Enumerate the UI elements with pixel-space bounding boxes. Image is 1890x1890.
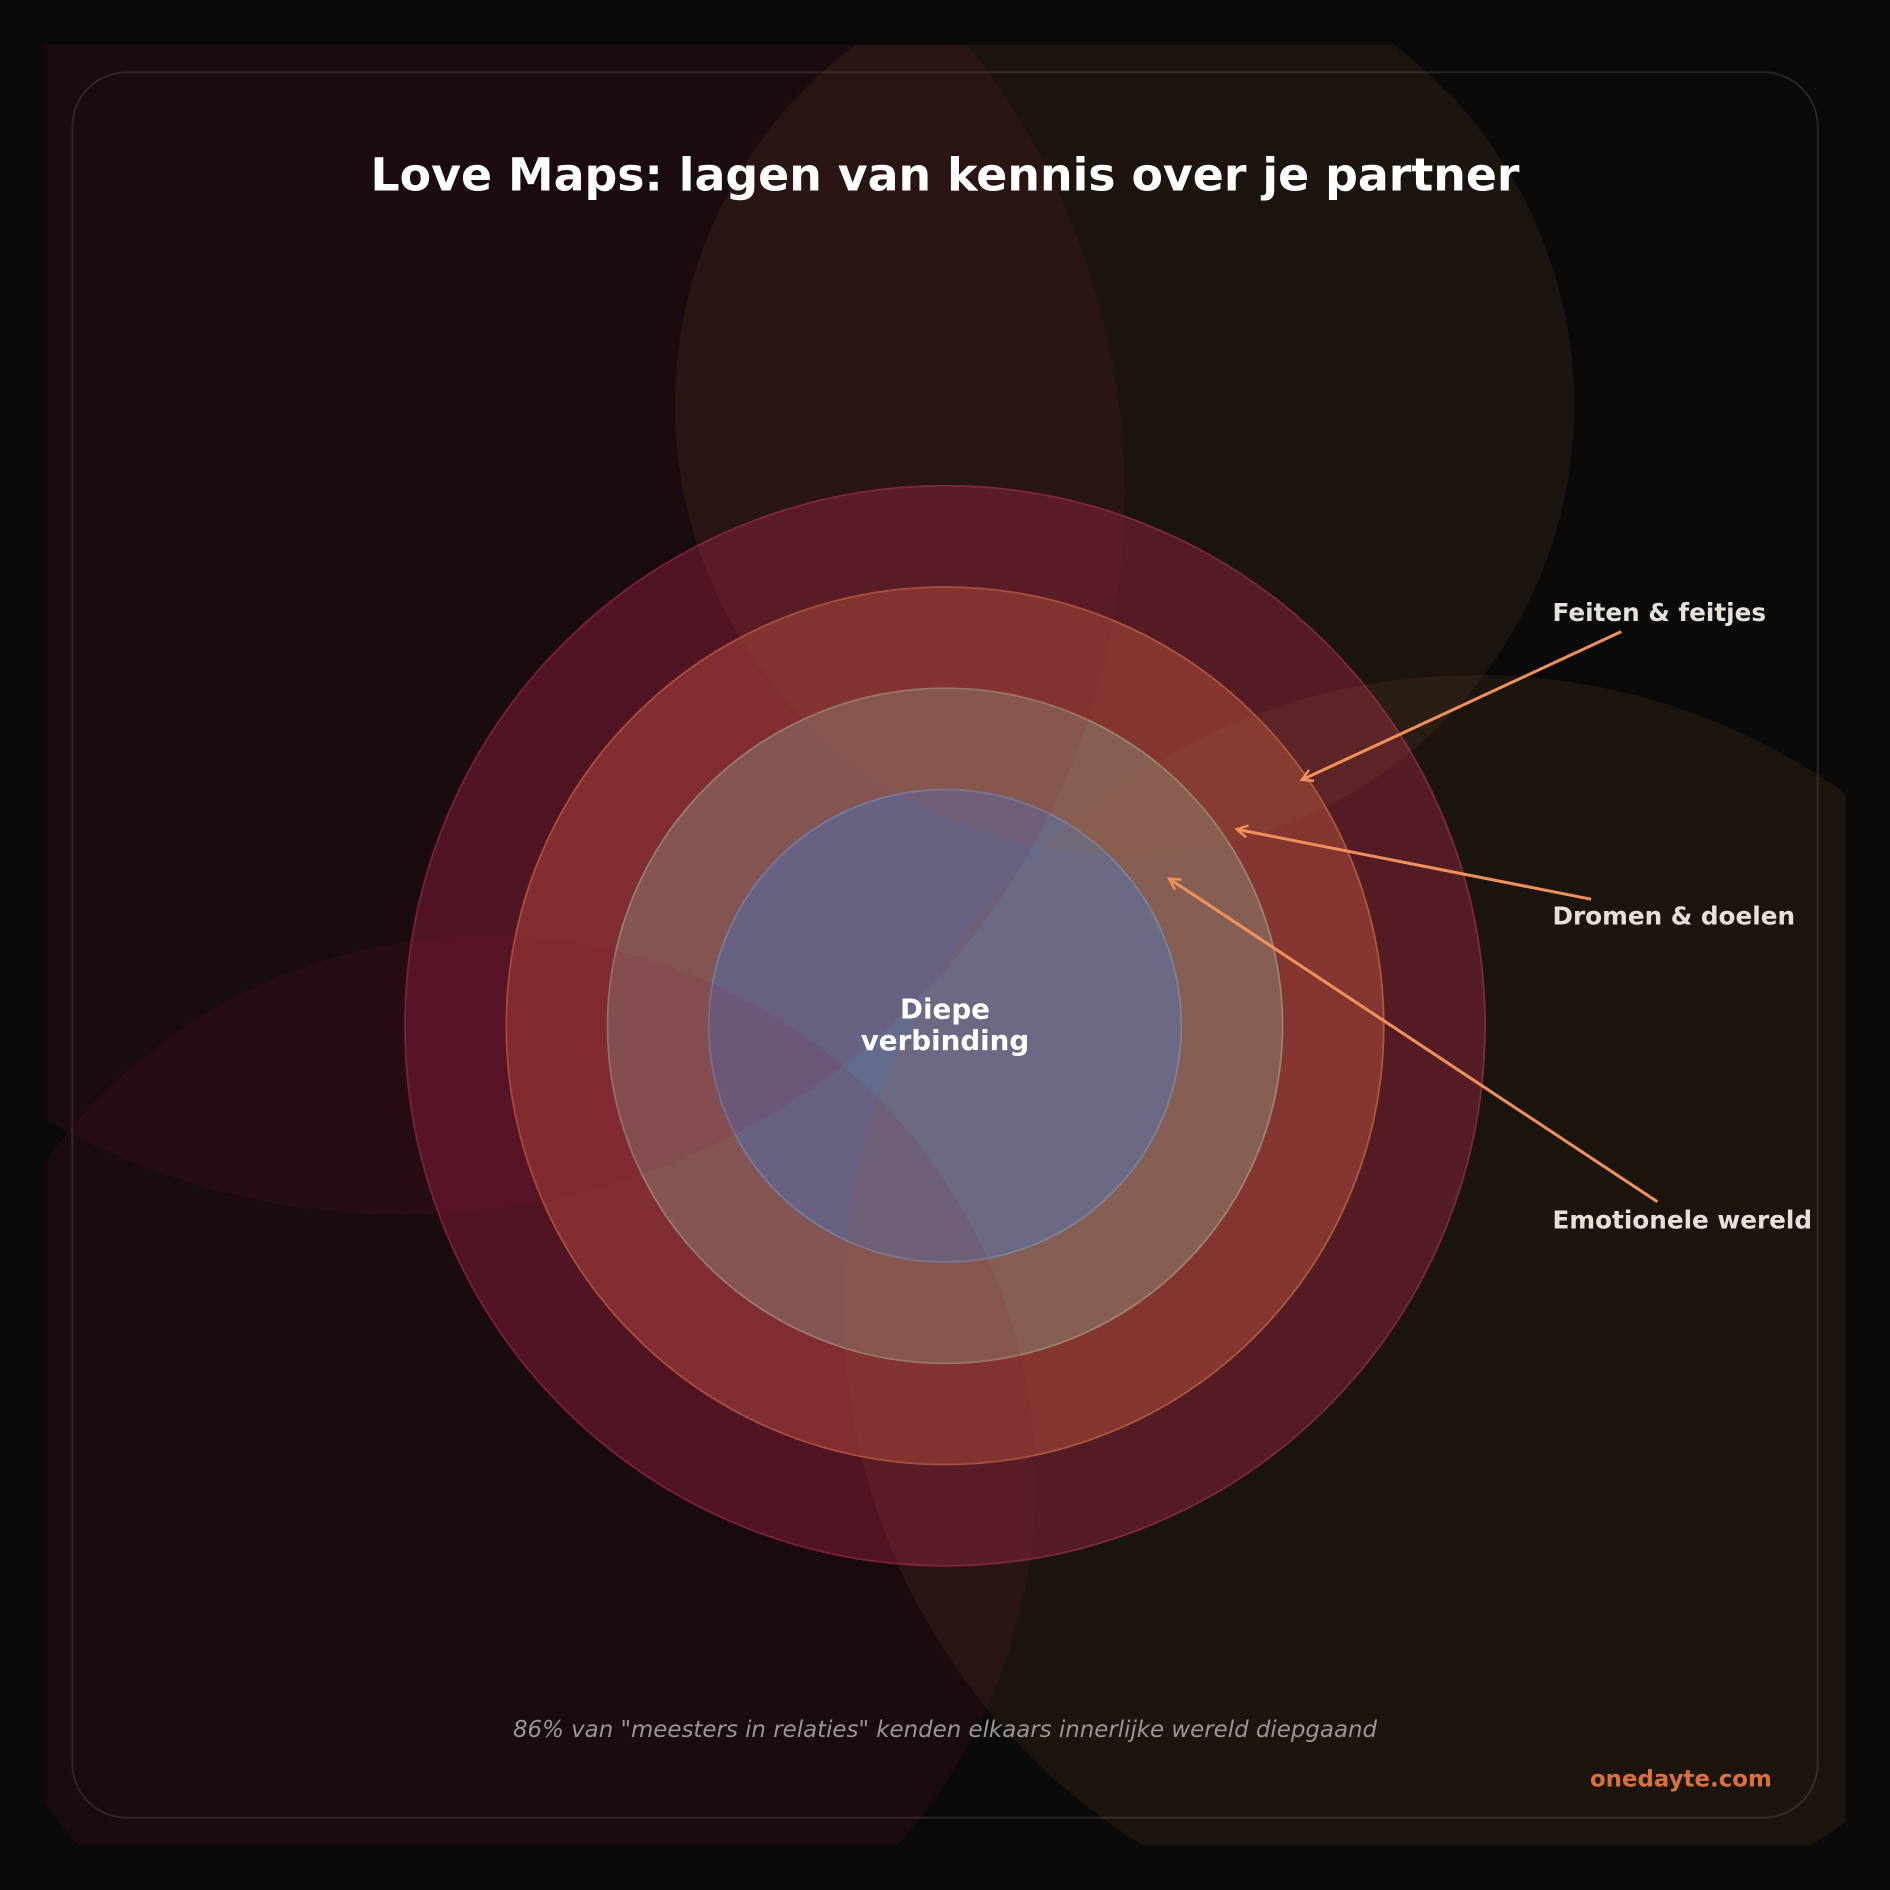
- layered circles diagram: [405, 486, 1485, 1566]
- label: Emotionele wereld: Emotionele wereld: [1552, 1205, 1812, 1234]
- title: Love Maps: lagen van kennis over je partner: [371, 147, 1520, 201]
- footer note: 86% van "meesters in relaties" kenden elkaars innerlijke wereld diepgaand: [513, 1717, 1377, 1743]
- label: Feiten & feitjes: [1302, 598, 1766, 780]
- label: Dromen & doelen: [1237, 829, 1795, 931]
- label: Dromen & doelen: Dromen & doelen: [1552, 902, 1795, 931]
- center label: Diepe: [900, 993, 990, 1026]
- center label: verbinding: [861, 1024, 1029, 1057]
- label: Emotionele wereld: [1169, 879, 1812, 1234]
- brand: onedayte.com: [1590, 1766, 1772, 1792]
- label: Feiten & feitjes: Feiten & feitjes: [1552, 598, 1766, 627]
- center label: [861, 993, 1029, 1057]
